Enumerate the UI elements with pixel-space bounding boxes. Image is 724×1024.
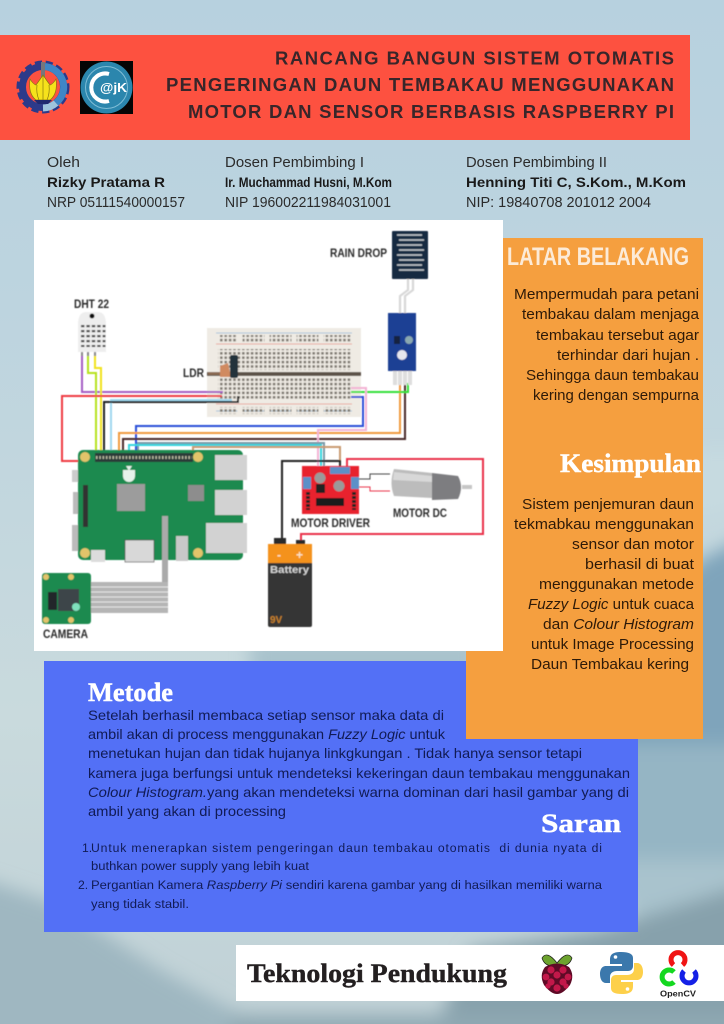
component: Raspberry Pi board (72, 450, 247, 562)
author block: Rizky Pratama R (47, 174, 165, 190)
supervisor II block (466, 155, 686, 211)
text block: latar belakang body (514, 286, 700, 404)
panel: metode and saran (44, 661, 638, 932)
component: ribbon cable (91, 516, 168, 613)
author block: Oleh (47, 155, 80, 171)
component: 9V battery: + (296, 548, 303, 562)
component: DC motor (359, 469, 472, 520)
component: DHT22 sensor: DHT 22 (74, 299, 109, 311)
component: rain drop sensor: RAIN DROP (330, 248, 387, 260)
supervisor I block (225, 155, 392, 211)
text block: kesimpulan body: sensor dan motor (572, 536, 694, 553)
icon: python (600, 952, 643, 994)
text block: kesimpulan body: untuk Image Processing (531, 636, 694, 653)
icon: opencv (660, 953, 697, 998)
text block: metode body: kamera juga berfungsi untuk mendeteksi kekeringan daun tembakau menggunakan (88, 765, 630, 781)
component: 9V battery (268, 538, 312, 627)
text block: kesimpulan body: Daun Tembakau kering (531, 656, 689, 673)
text block: latar belakang body: tembakau dalam menjaga (522, 306, 700, 323)
title: PENGERINGAN DAUN TEMBAKAU MENGGUNAKAN (166, 74, 674, 95)
text block: kesimpulan body: Fuzzy Logic untuk cuaca (528, 596, 695, 613)
text block: latar belakang body: Sehingga daun tembakau (526, 367, 699, 384)
supervisor II block: Dosen Pembimbing II (466, 155, 607, 171)
wires (62, 352, 483, 540)
text block: metode body: Setelah berhasil membaca setiap sensor maka data di (88, 707, 444, 723)
component: 9V battery: Battery (270, 564, 309, 576)
heading: metode: Metode (88, 678, 173, 707)
component: camera module (42, 573, 91, 641)
title: MOTOR DAN SENSOR BERBASIS RASPBERRY PI (188, 101, 674, 122)
text block: kesimpulan body: Sistem penjemuran daun (522, 496, 694, 513)
text block: kesimpulan body: dan Colour Histogram (543, 616, 694, 633)
text block: kesimpulan body: berhasil di buat (585, 556, 695, 573)
panel: teknologi pendukung (236, 945, 724, 1001)
component: motor driver: MOTOR DRIVER (291, 518, 371, 530)
heading: kesimpulan: Kesimpulan (560, 449, 702, 478)
component: DC motor: MOTOR DC (393, 508, 447, 520)
text block: kesimpulan body: tekmabkau menggunakan (514, 516, 694, 533)
component: DHT22 sensor (74, 299, 109, 356)
list: saran items (78, 841, 602, 911)
text block: kesimpulan body: menggunakan metode (539, 576, 694, 593)
supervisor I block: Ir. Muchammad Husni, M.Kom (225, 174, 392, 190)
component: rain drop sensor (330, 231, 428, 313)
icon: @jK logo: @jK (100, 80, 128, 95)
heading: teknologi pendukung: Teknologi Pendukung (247, 959, 507, 988)
component: 9V battery: 9V (270, 615, 283, 626)
icon: raspberry pi (542, 955, 572, 994)
supervisor II block: Henning Titi C, S.Kom., M.Kom (466, 174, 686, 190)
component: camera module: CAMERA (43, 629, 88, 641)
breadboard (207, 328, 361, 417)
text block: latar belakang body: terhindar dari hujan . (557, 347, 699, 364)
text block: latar belakang body: tembakau tersebut agar (536, 327, 699, 344)
text block: kesimpulan body (514, 496, 695, 673)
title (166, 48, 674, 122)
title: RANCANG BANGUN SISTEM OTOMATIS (275, 48, 674, 68)
author block: NRP 05111540000157 (47, 195, 185, 211)
icon: ITS logo (19, 62, 67, 111)
text block: metode body: ambil yang akan di processing (88, 803, 286, 819)
author block (47, 155, 185, 211)
icon: opencv: OpenCV (660, 990, 697, 998)
text block: latar belakang body: kering dengan sempurna (533, 387, 700, 404)
component: LDR (183, 355, 238, 380)
list: saran items: yang tidak stabil. (91, 897, 189, 911)
panel: header banner (0, 35, 690, 140)
text block: metode body: Colour Histogram. yang akan mendeteksi warna dominan dari hasil gambar yang di (88, 784, 629, 800)
supervisor II block: NIP: 19840708 201012 2004 (466, 195, 651, 211)
list: saran items: buthkan power supply yang lebih kuat (91, 859, 310, 873)
component: LDR: LDR (183, 368, 205, 380)
text block: metode body: menetukan hujan dan tidak hujanya linkgkungan . Tidak hanya sensor tetapi (88, 745, 582, 761)
component: rain sensor module (388, 313, 416, 385)
list: saran items: 1. (82, 841, 92, 855)
panel: latar belakang and kesimpulan (466, 238, 703, 739)
heading: saran: Saran (541, 809, 622, 838)
list: saran items: 2. (78, 878, 88, 892)
icon: @jK logo (80, 61, 133, 114)
text block: metode body (88, 707, 630, 819)
list: saran items: Untuk menerapkan sistem pengeringan daun tembakau otomatis di dunia nyata di (91, 841, 602, 855)
supervisor I block: NIP 196002211984031001 (225, 195, 391, 211)
panel: wiring diagram (34, 220, 503, 651)
text block: latar belakang body: Mempermudah para petani (514, 286, 699, 303)
supervisor I block: Dosen Pembimbing I (225, 155, 364, 171)
list: saran items: Pergantian Kamera Raspberry Pi sendiri karena gambar yang di hasilkan memiliki warna (91, 878, 602, 892)
text block: metode body: ambil akan di process menggunakan Fuzzy Logic untuk (88, 726, 446, 742)
component: motor driver (291, 466, 371, 530)
component: 9V battery: - (277, 548, 281, 562)
